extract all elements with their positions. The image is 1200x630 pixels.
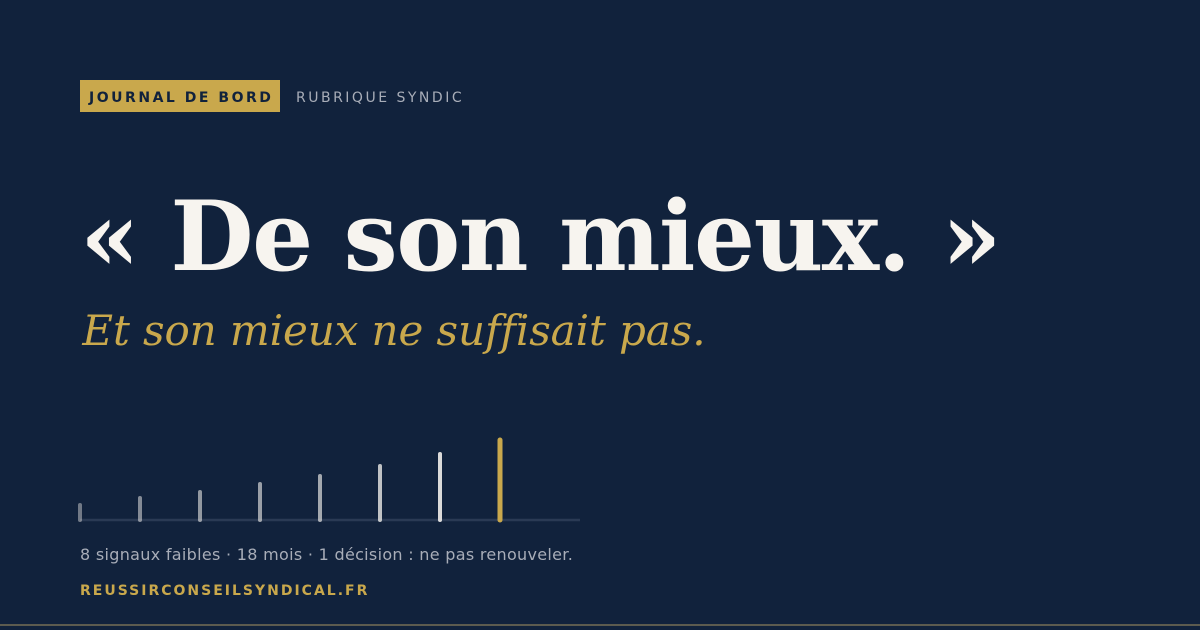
rubric label: RUBRIQUE SYNDIC [296,90,464,106]
signal bar 1 [78,505,82,520]
title: « De son mieux. » [80,180,1000,293]
subtitle: Et son mieux ne suffisait pas. [82,306,706,355]
signal bar 4 [258,484,262,520]
signal bar 8: decision [498,440,502,520]
badge: journal de bord: JOURNAL DE BORD [89,90,273,106]
caption: 8 signaux faibles · 18 mois · 1 décision : ne pas renouveler. [80,545,573,564]
signal bar 2 [138,498,142,520]
website url: REUSSIRCONSEILSYNDICAL.FR [80,583,369,599]
signal bar 7 [438,454,442,520]
signal bar 6 [378,466,382,520]
chart: rising signals [78,438,580,522]
badge: journal de bord [80,80,280,112]
signal bar 3 [198,492,202,520]
signal bar 5 [318,476,322,520]
bottom rule [0,624,1200,626]
